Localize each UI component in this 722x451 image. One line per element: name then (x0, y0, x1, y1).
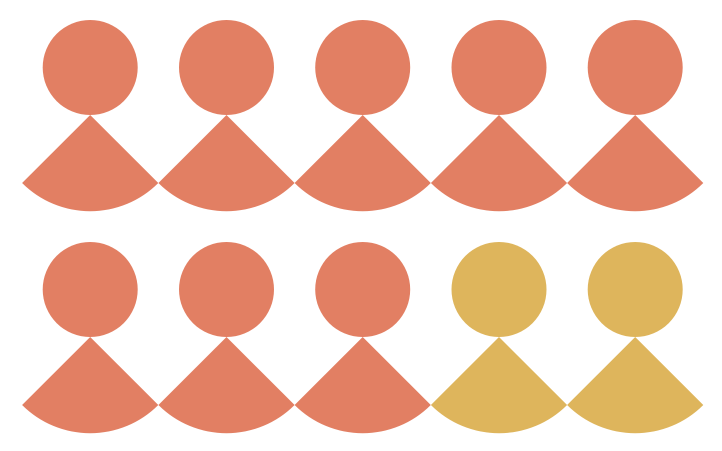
person 8 (295, 242, 431, 433)
person 1 (22, 20, 158, 211)
person 4 (431, 20, 567, 211)
person 9 (yellow) (431, 242, 567, 433)
person 6 (22, 242, 158, 433)
person 5 (567, 20, 703, 211)
row 2 of people (22, 242, 703, 433)
person 10 (yellow) (567, 242, 703, 433)
person 2 (158, 20, 295, 211)
person 7 (158, 242, 295, 433)
person 3 (295, 20, 431, 211)
row 1 of people (22, 20, 703, 211)
